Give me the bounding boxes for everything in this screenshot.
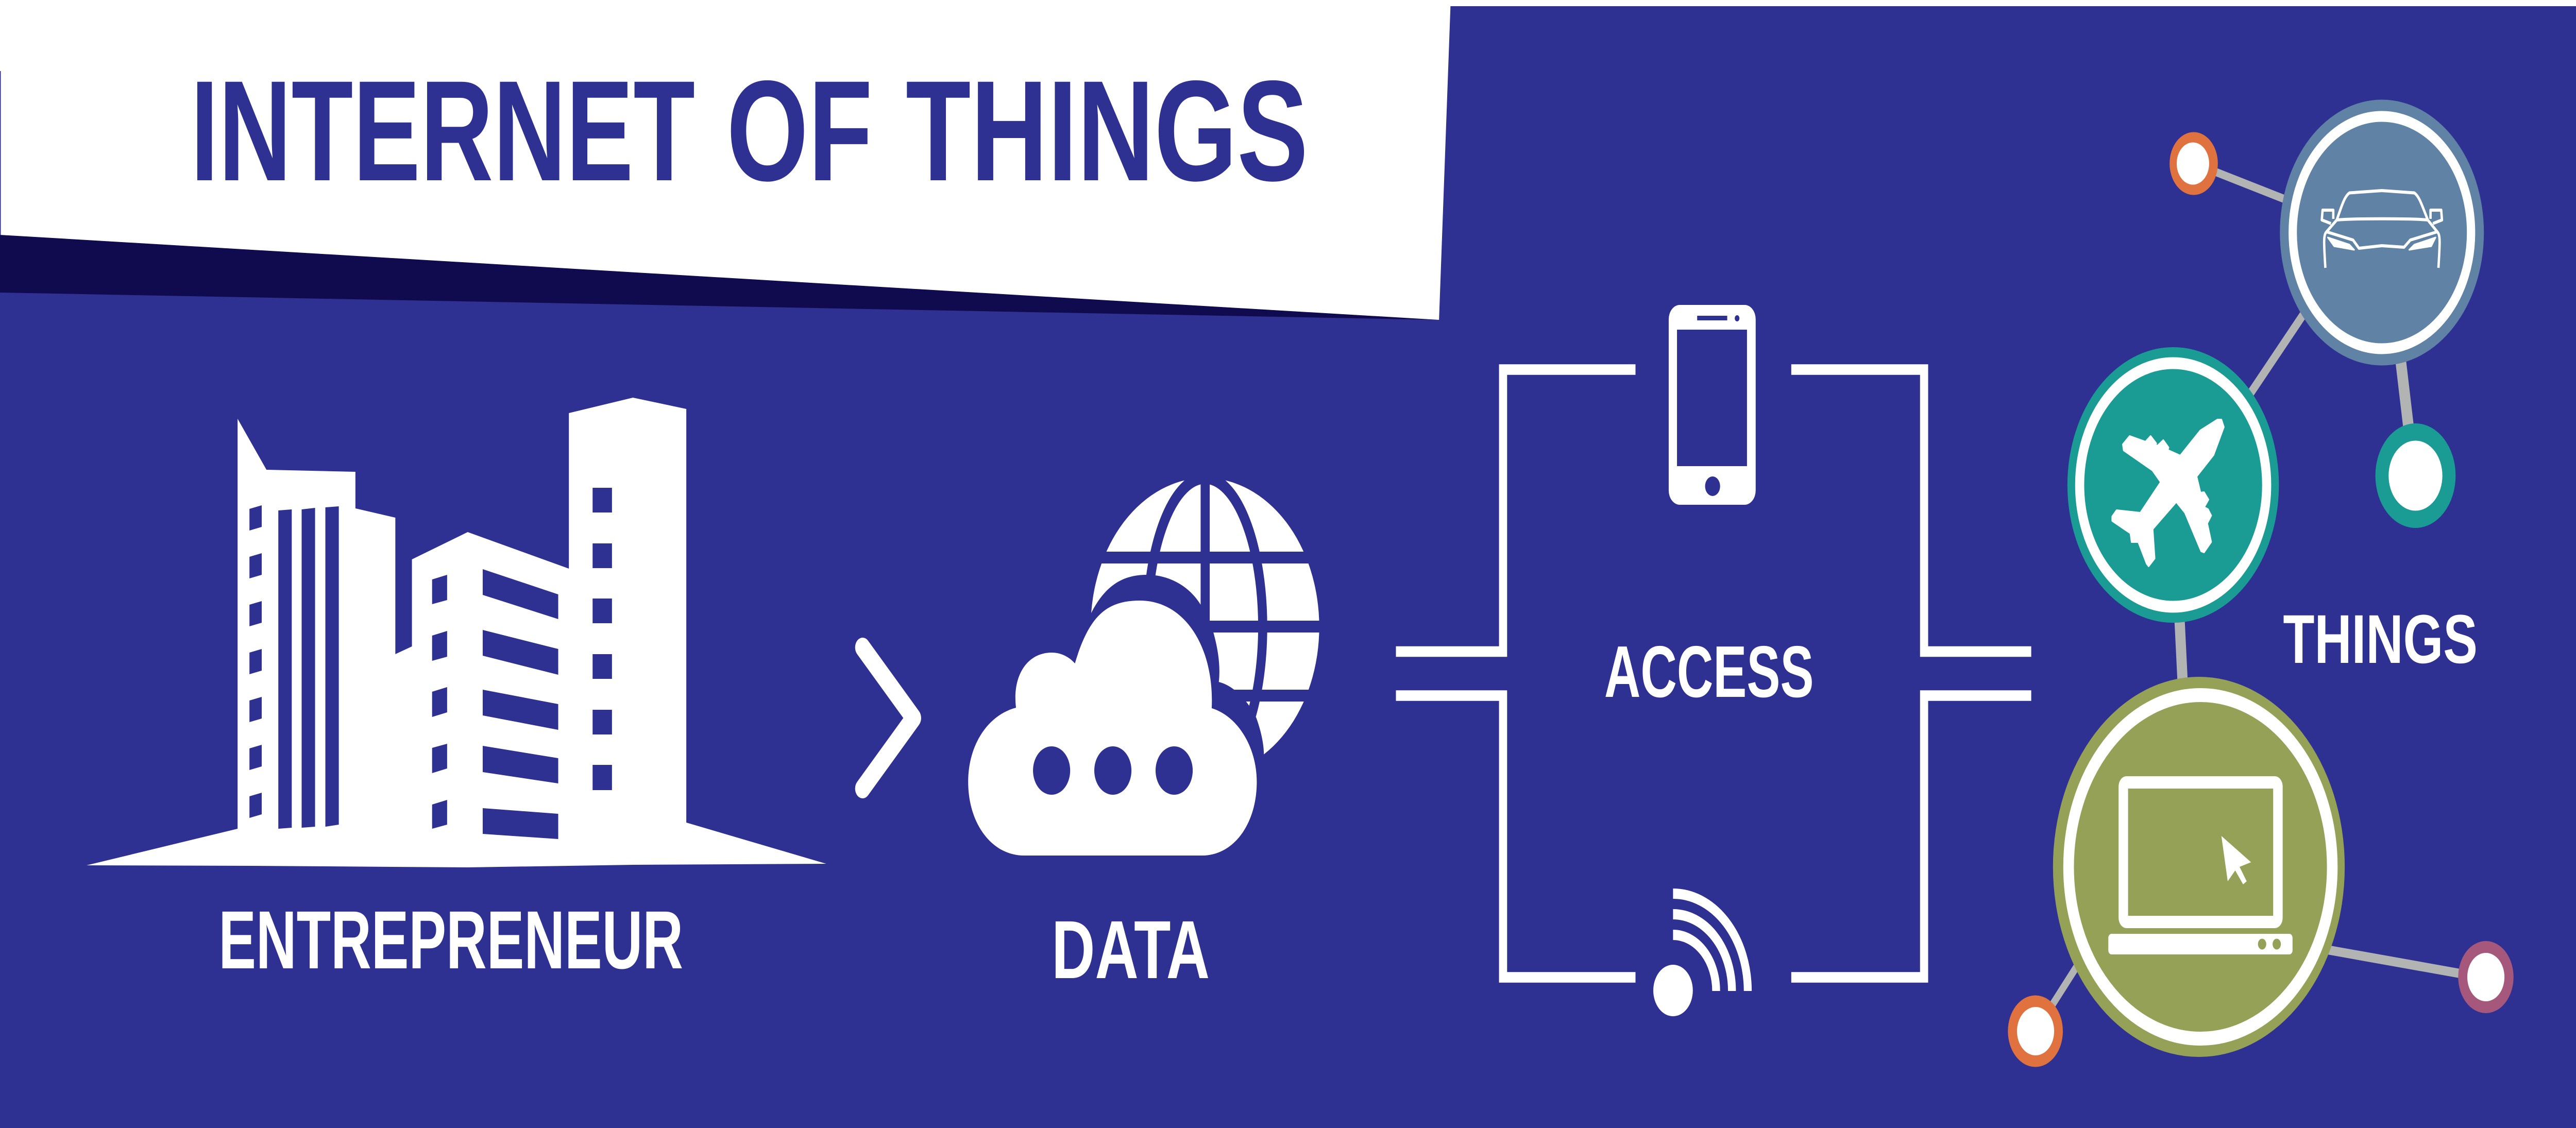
icon: smartphone	[1669, 305, 1756, 505]
icon: airplane	[2112, 420, 2224, 566]
icon: cloud and globe	[968, 474, 1325, 876]
access brackets	[1396, 370, 2031, 978]
globe	[1083, 474, 1325, 876]
title banner	[0, 0, 1450, 320]
label: things: THINGS	[2283, 601, 2478, 678]
title: INTERNET	[191, 51, 695, 211]
node: magenta	[2458, 941, 2514, 1013]
cloud	[968, 601, 1257, 856]
label: entrepreneur: ENTREPRENEUR	[218, 894, 683, 986]
label: data: DATA	[1052, 904, 1210, 996]
node: orange top	[2170, 132, 2218, 195]
banner shadow	[0, 235, 1439, 320]
icon: office buildings	[87, 398, 826, 867]
icon: car	[2322, 191, 2442, 268]
icon: computer monitor	[2108, 776, 2293, 954]
node: teal	[2376, 423, 2455, 528]
banner panel	[0, 0, 1450, 320]
icon: wifi signal	[1653, 894, 1748, 1016]
circle: car	[2280, 100, 2484, 366]
arrow: chevron	[862, 647, 913, 789]
things network	[2008, 100, 2514, 1067]
title: OF	[726, 51, 873, 211]
connector lines	[2036, 163, 2486, 1031]
circle: airplane	[2067, 347, 2279, 623]
circle: computer	[2053, 677, 2345, 1057]
node: orange bottom	[2008, 995, 2063, 1067]
label: access: ACCESS	[1604, 630, 1814, 712]
title: THINGS	[906, 51, 1308, 211]
title	[191, 51, 1308, 211]
